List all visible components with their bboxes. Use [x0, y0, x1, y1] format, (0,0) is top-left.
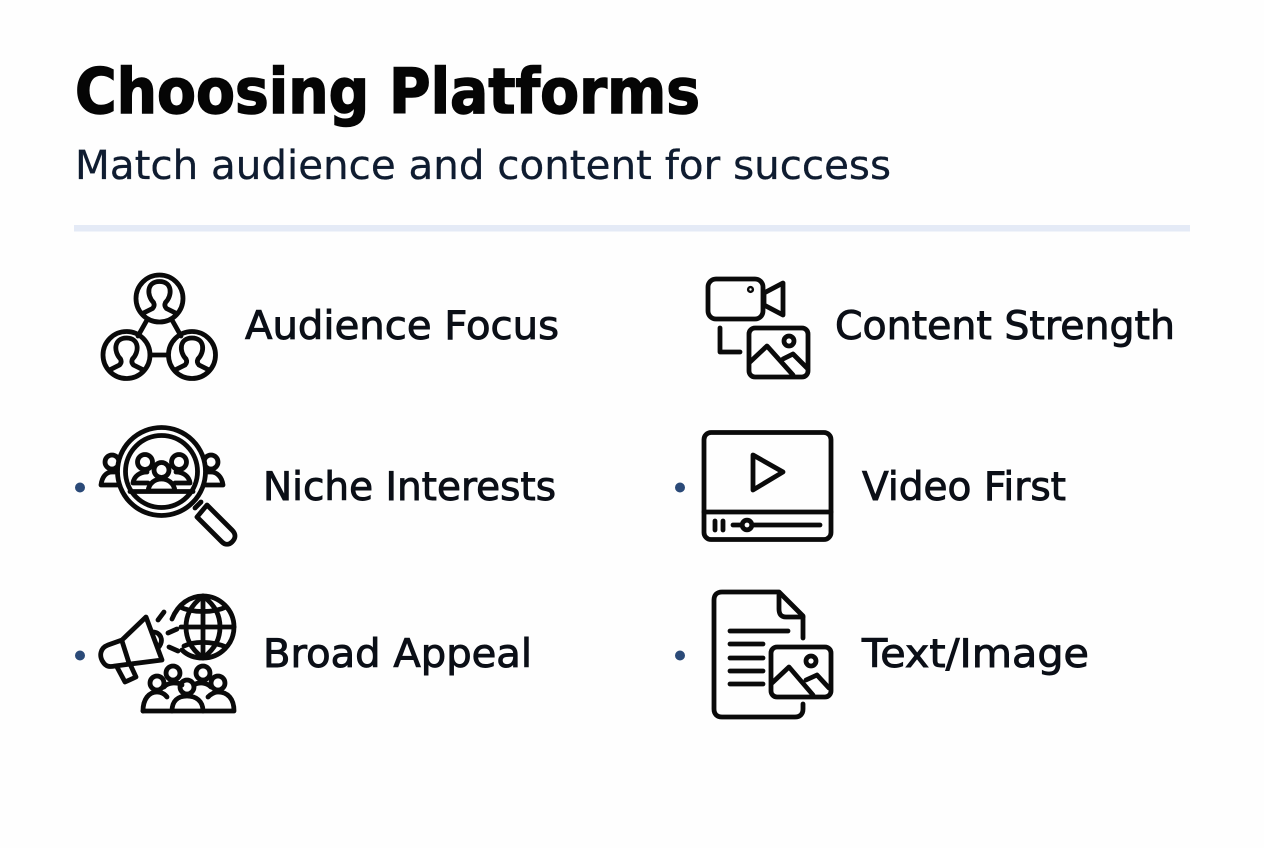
- icon: video camera and image: [708, 279, 808, 377]
- title: Choosing Platforms: [75, 55, 700, 128]
- panel: content strength column: [675, 279, 1175, 717]
- label: video first: Video First: [862, 465, 1066, 510]
- subtitle: Match audience and content for success: [75, 143, 891, 189]
- bullet: text/image: [675, 650, 685, 660]
- bullet: video first: [675, 482, 685, 492]
- icon: megaphone, globe and crowd: [101, 596, 234, 711]
- bullet: niche interests: [75, 482, 85, 492]
- label: text/image: Text/Image: [861, 632, 1089, 677]
- label: niche interests: Niche Interests: [263, 465, 556, 510]
- panel: audience focus column: [75, 275, 559, 711]
- icon: video player: [704, 432, 831, 540]
- heading: audience focus: Audience Focus: [245, 304, 559, 349]
- label: broad appeal: Broad Appeal: [263, 632, 532, 677]
- icon: document with image: [714, 592, 831, 717]
- bullet: broad appeal: [75, 650, 85, 660]
- heading: content strength: Content Strength: [835, 304, 1175, 349]
- icon: connected audience: [103, 275, 216, 378]
- icon: magnifier over group: [101, 428, 235, 544]
